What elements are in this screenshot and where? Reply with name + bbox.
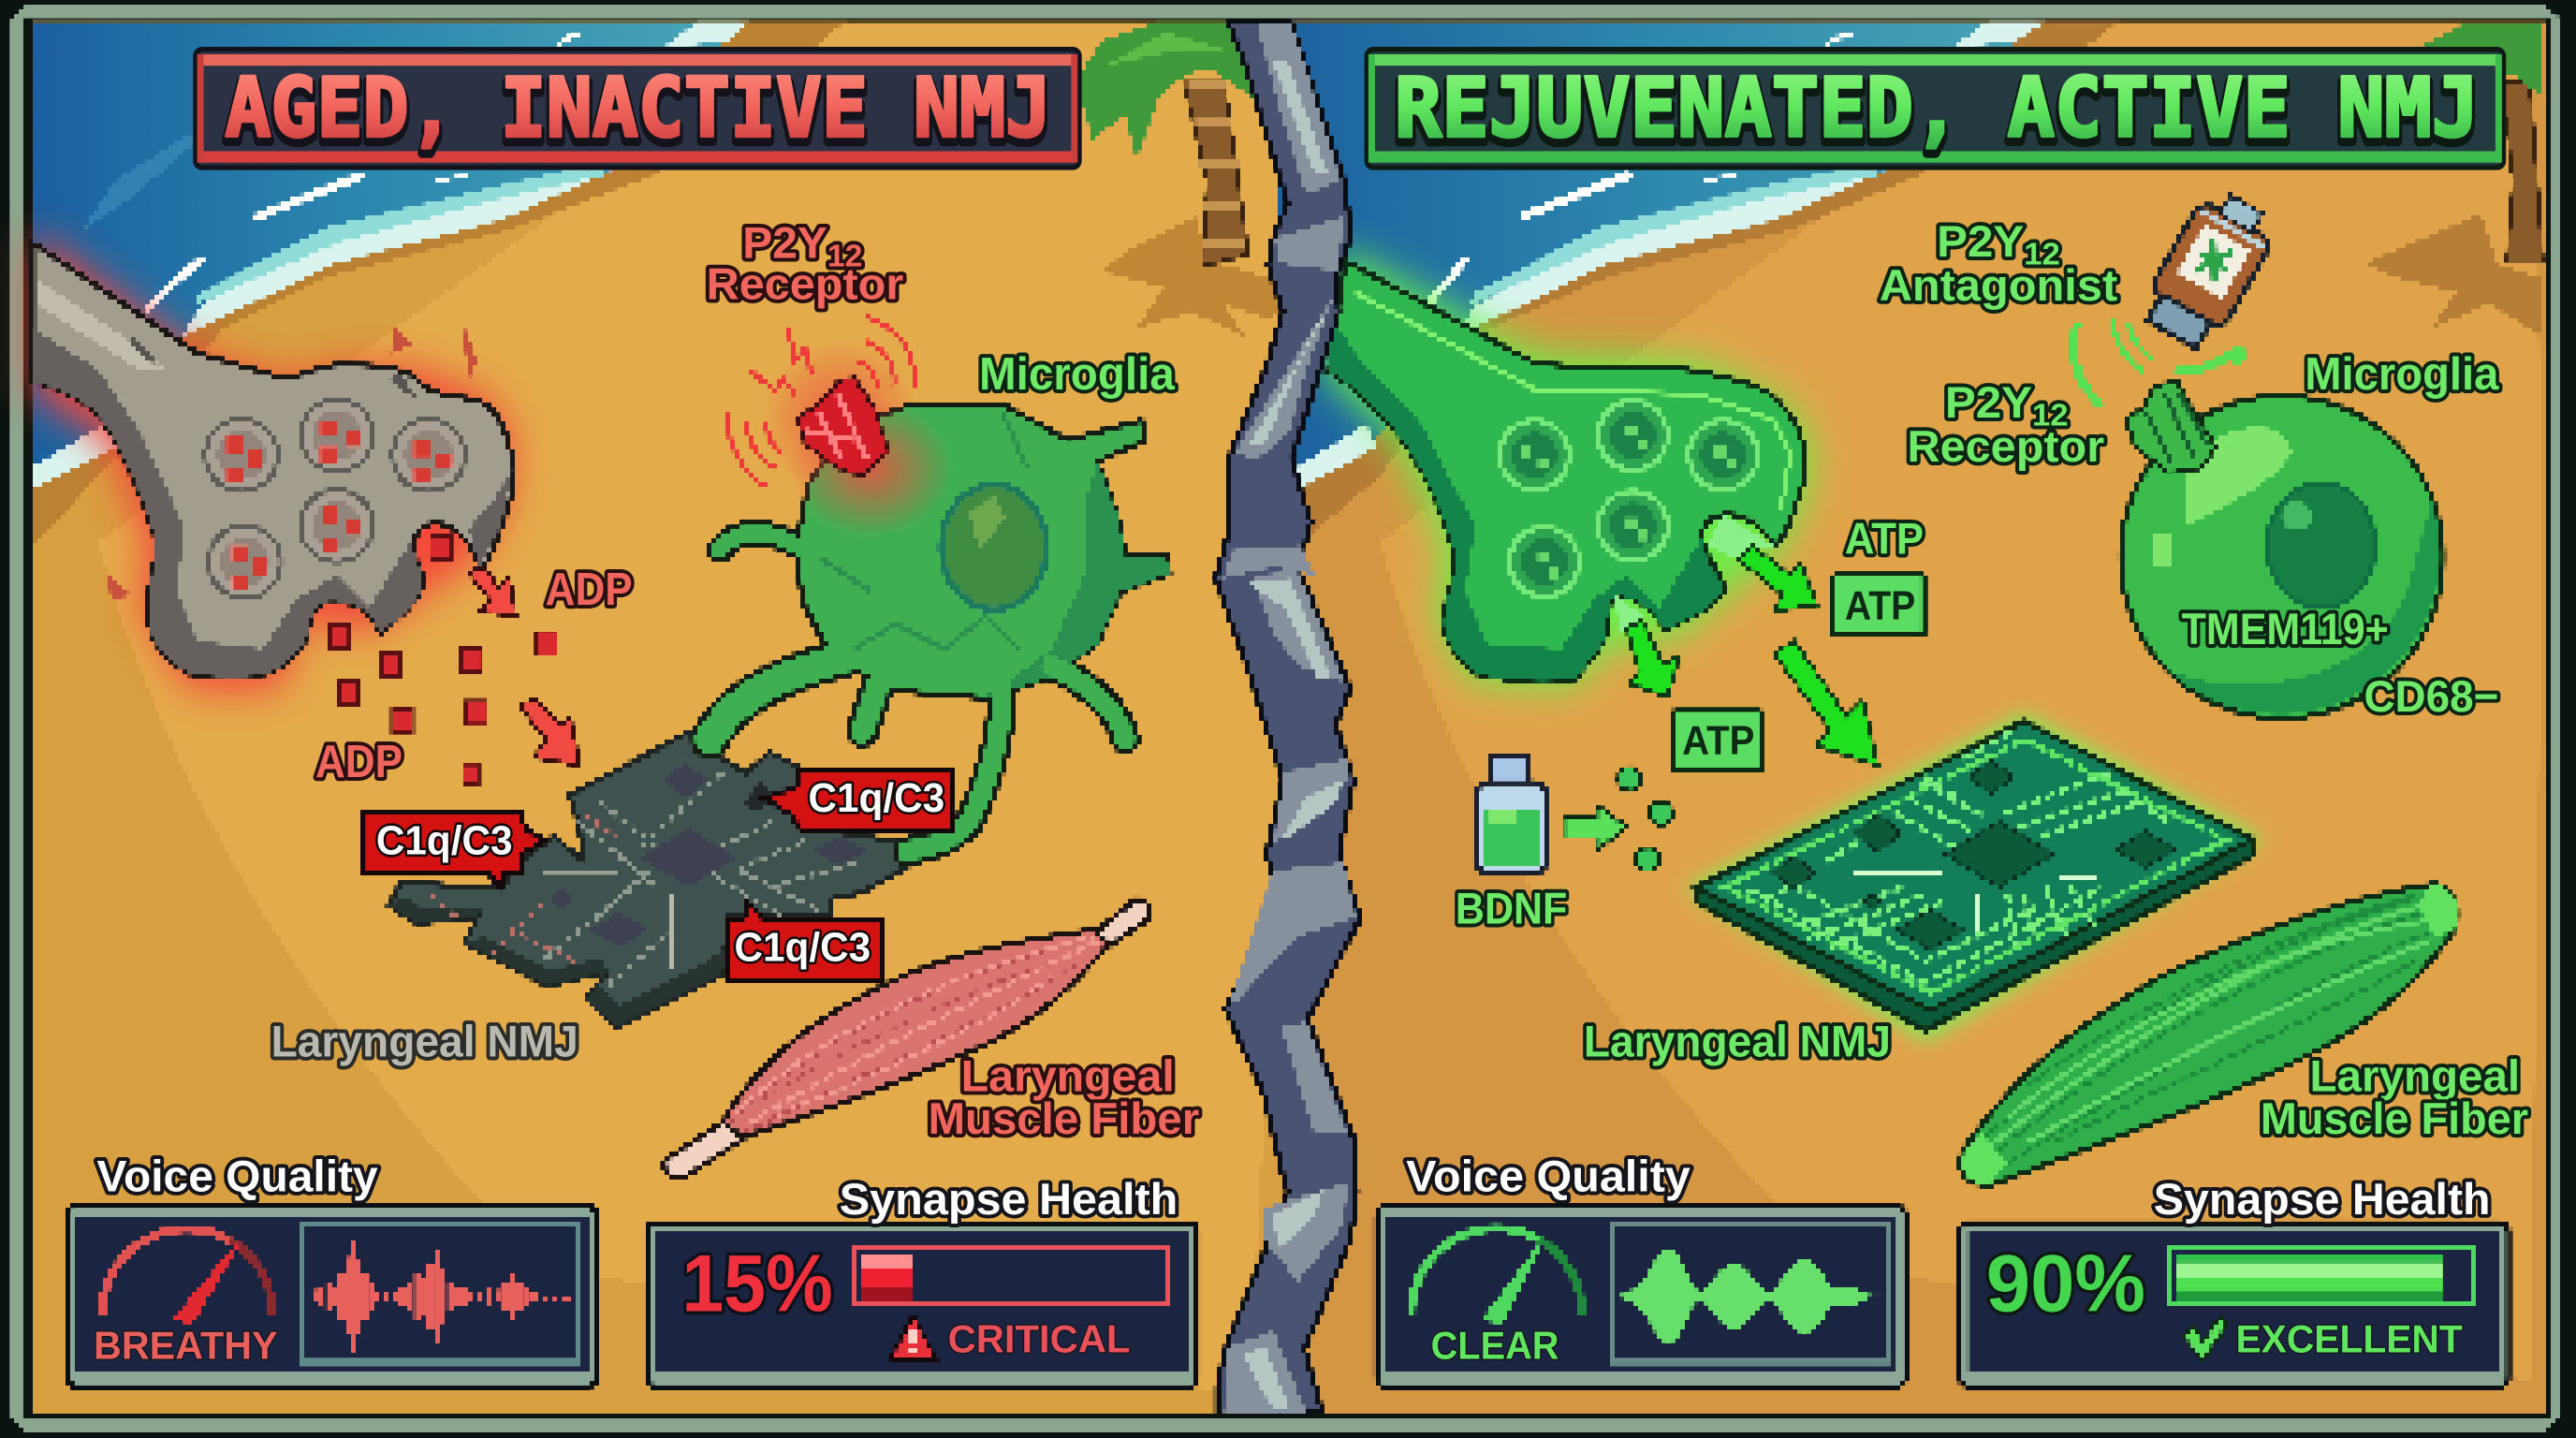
icon: ATP box lower — [1673, 712, 1763, 770]
glow: left terminal — [33, 230, 2263, 1042]
health bar 15 percent — [855, 1247, 1166, 1304]
label: callout text top: C1q/C3 — [808, 775, 944, 821]
title text right: REJUVENATED, ACTIVE NMJ — [1395, 61, 2479, 156]
label: muscle fiber right — [2261, 1051, 2528, 1144]
icon: antagonist bottle — [2136, 184, 2282, 355]
label: clear: CLEAR — [1431, 1323, 1559, 1367]
label: critical: CRITICAL — [948, 1316, 1130, 1360]
panel: voice quality left — [67, 1206, 596, 1387]
ADP particles and arrows — [107, 324, 580, 784]
label: callout text left: C1q/C3 — [376, 818, 513, 864]
title text left: AGED, INACTIVE NMJ — [225, 61, 1051, 156]
label: microglia left: Microglia — [979, 349, 1175, 400]
left laryngeal muscle fiber — [665, 899, 1149, 1178]
ATP arrows — [1626, 546, 1878, 766]
label: TMEM119+: TMEM119+ — [2182, 605, 2389, 654]
rock divider — [1216, 23, 1360, 1413]
label: P2Y12 antagonist: Antagonist — [1880, 261, 2117, 311]
label: ATP free: ATP — [1845, 514, 1924, 564]
damaged circuit board — [389, 733, 923, 1027]
heading: voice quality left: Voice Quality — [97, 1152, 378, 1201]
label: P2Y12 antagonist: 12 — [2024, 238, 2060, 272]
label: ADP lower: ADP — [315, 737, 402, 787]
heading: voice quality right: Voice Quality — [1406, 1152, 1691, 1201]
label: P2Y12 antagonist — [1880, 217, 2117, 311]
vesicles — [205, 399, 465, 598]
waveform clear — [1617, 1251, 1882, 1343]
label: muscle fiber left: Laryngeal — [961, 1051, 1175, 1101]
icon: gauge clear — [1412, 1228, 1582, 1325]
label: excellent: EXCELLENT — [2236, 1316, 2463, 1360]
label: CD68-: CD68− — [2364, 672, 2498, 722]
label: ADP upper: ADP — [546, 565, 633, 615]
icon: warning triangle — [890, 1314, 936, 1358]
icon: gauge breathy — [102, 1229, 272, 1325]
title text left: AGED, INACTIVE NMJ — [225, 66, 1051, 161]
vesicles — [1500, 401, 1758, 596]
heading: synapse health left: Synapse Health — [840, 1175, 1178, 1225]
glow: receptor — [762, 340, 920, 498]
label: muscle fiber left — [929, 1051, 1199, 1144]
icon: BDNF bottle — [1475, 756, 1547, 874]
label: laryngeal NMJ left: Laryngeal NMJ — [271, 1017, 578, 1066]
left beach — [33, 22, 1297, 1415]
label: ATP box lower: ATP — [1682, 718, 1754, 764]
stat: 15 percent: 15% — [681, 1239, 833, 1328]
stat: 90 percent: 90% — [1986, 1239, 2145, 1328]
icon: left palm tree — [1076, 22, 1284, 337]
icon: right P2Y12 receptor — [2126, 381, 2216, 473]
icon: right palm tree — [2365, 23, 2543, 337]
waveform breathy — [315, 1240, 566, 1352]
panel: synapse health right — [1960, 1223, 2509, 1387]
label: P2Y12 receptor left — [707, 219, 903, 309]
left microglia — [710, 399, 1170, 851]
label: P2Y12 receptor left: Receptor — [707, 259, 903, 309]
label: callout text bottom: C1q/C3 — [734, 925, 871, 971]
label: P2Y12 receptor right — [1908, 378, 2104, 472]
panel frame: title left — [196, 50, 1079, 168]
label: breathy: BREATHY — [94, 1323, 278, 1367]
panel: synapse health left — [647, 1223, 1197, 1387]
callout: C1q/C3 top — [764, 769, 953, 829]
drug streaks — [2073, 322, 2246, 404]
label: P2Y12 receptor right: Receptor — [1908, 422, 2104, 472]
label: muscle fiber left: Muscle Fiber — [929, 1094, 1199, 1144]
panel: voice quality right — [1377, 1206, 1906, 1387]
icon: left P2Y12 receptor — [727, 317, 914, 486]
arrow and BDNF particles — [1564, 768, 1673, 871]
icon: check mark — [2183, 1318, 2228, 1360]
label: muscle fiber right: Laryngeal — [2310, 1051, 2520, 1101]
health bar 90 percent — [2170, 1247, 2474, 1304]
glow: right terminal — [1323, 246, 1812, 687]
right nerve terminal — [1329, 261, 1805, 681]
label: ATP box upper: ATP — [1845, 583, 1915, 629]
label: BDNF: BDNF — [1456, 884, 1567, 933]
healthy circuit board — [1697, 721, 2252, 1030]
label: P2Y12 receptor left: 12 — [827, 239, 862, 273]
callout: C1q/C3 left — [365, 814, 546, 888]
heading: synapse health right: Synapse Health — [2154, 1175, 2491, 1225]
label: laryngeal NMJ right: Laryngeal NMJ — [1584, 1017, 1891, 1066]
icon: ATP box upper — [1834, 575, 1924, 636]
panel frame: title right — [1367, 50, 2504, 168]
right beach — [1265, 22, 2546, 1415]
label: P2Y12 receptor left: P2Y — [742, 219, 827, 269]
label: muscle fiber right: Muscle Fiber — [2261, 1094, 2528, 1144]
label: P2Y12 receptor right: 12 — [2032, 399, 2069, 433]
label: P2Y12 receptor right: P2Y — [1945, 378, 2028, 428]
right microglia — [2121, 396, 2443, 718]
title text right: REJUVENATED, ACTIVE NMJ — [1395, 66, 2479, 161]
callout: C1q/C3 bottom — [729, 902, 881, 981]
right laryngeal muscle fiber — [1960, 884, 2457, 1186]
left nerve terminal — [33, 243, 513, 677]
glow: circuit board — [1686, 713, 2263, 1042]
label: P2Y12 antagonist: P2Y — [1937, 217, 2021, 267]
label: microglia right: Microglia — [2305, 349, 2499, 400]
